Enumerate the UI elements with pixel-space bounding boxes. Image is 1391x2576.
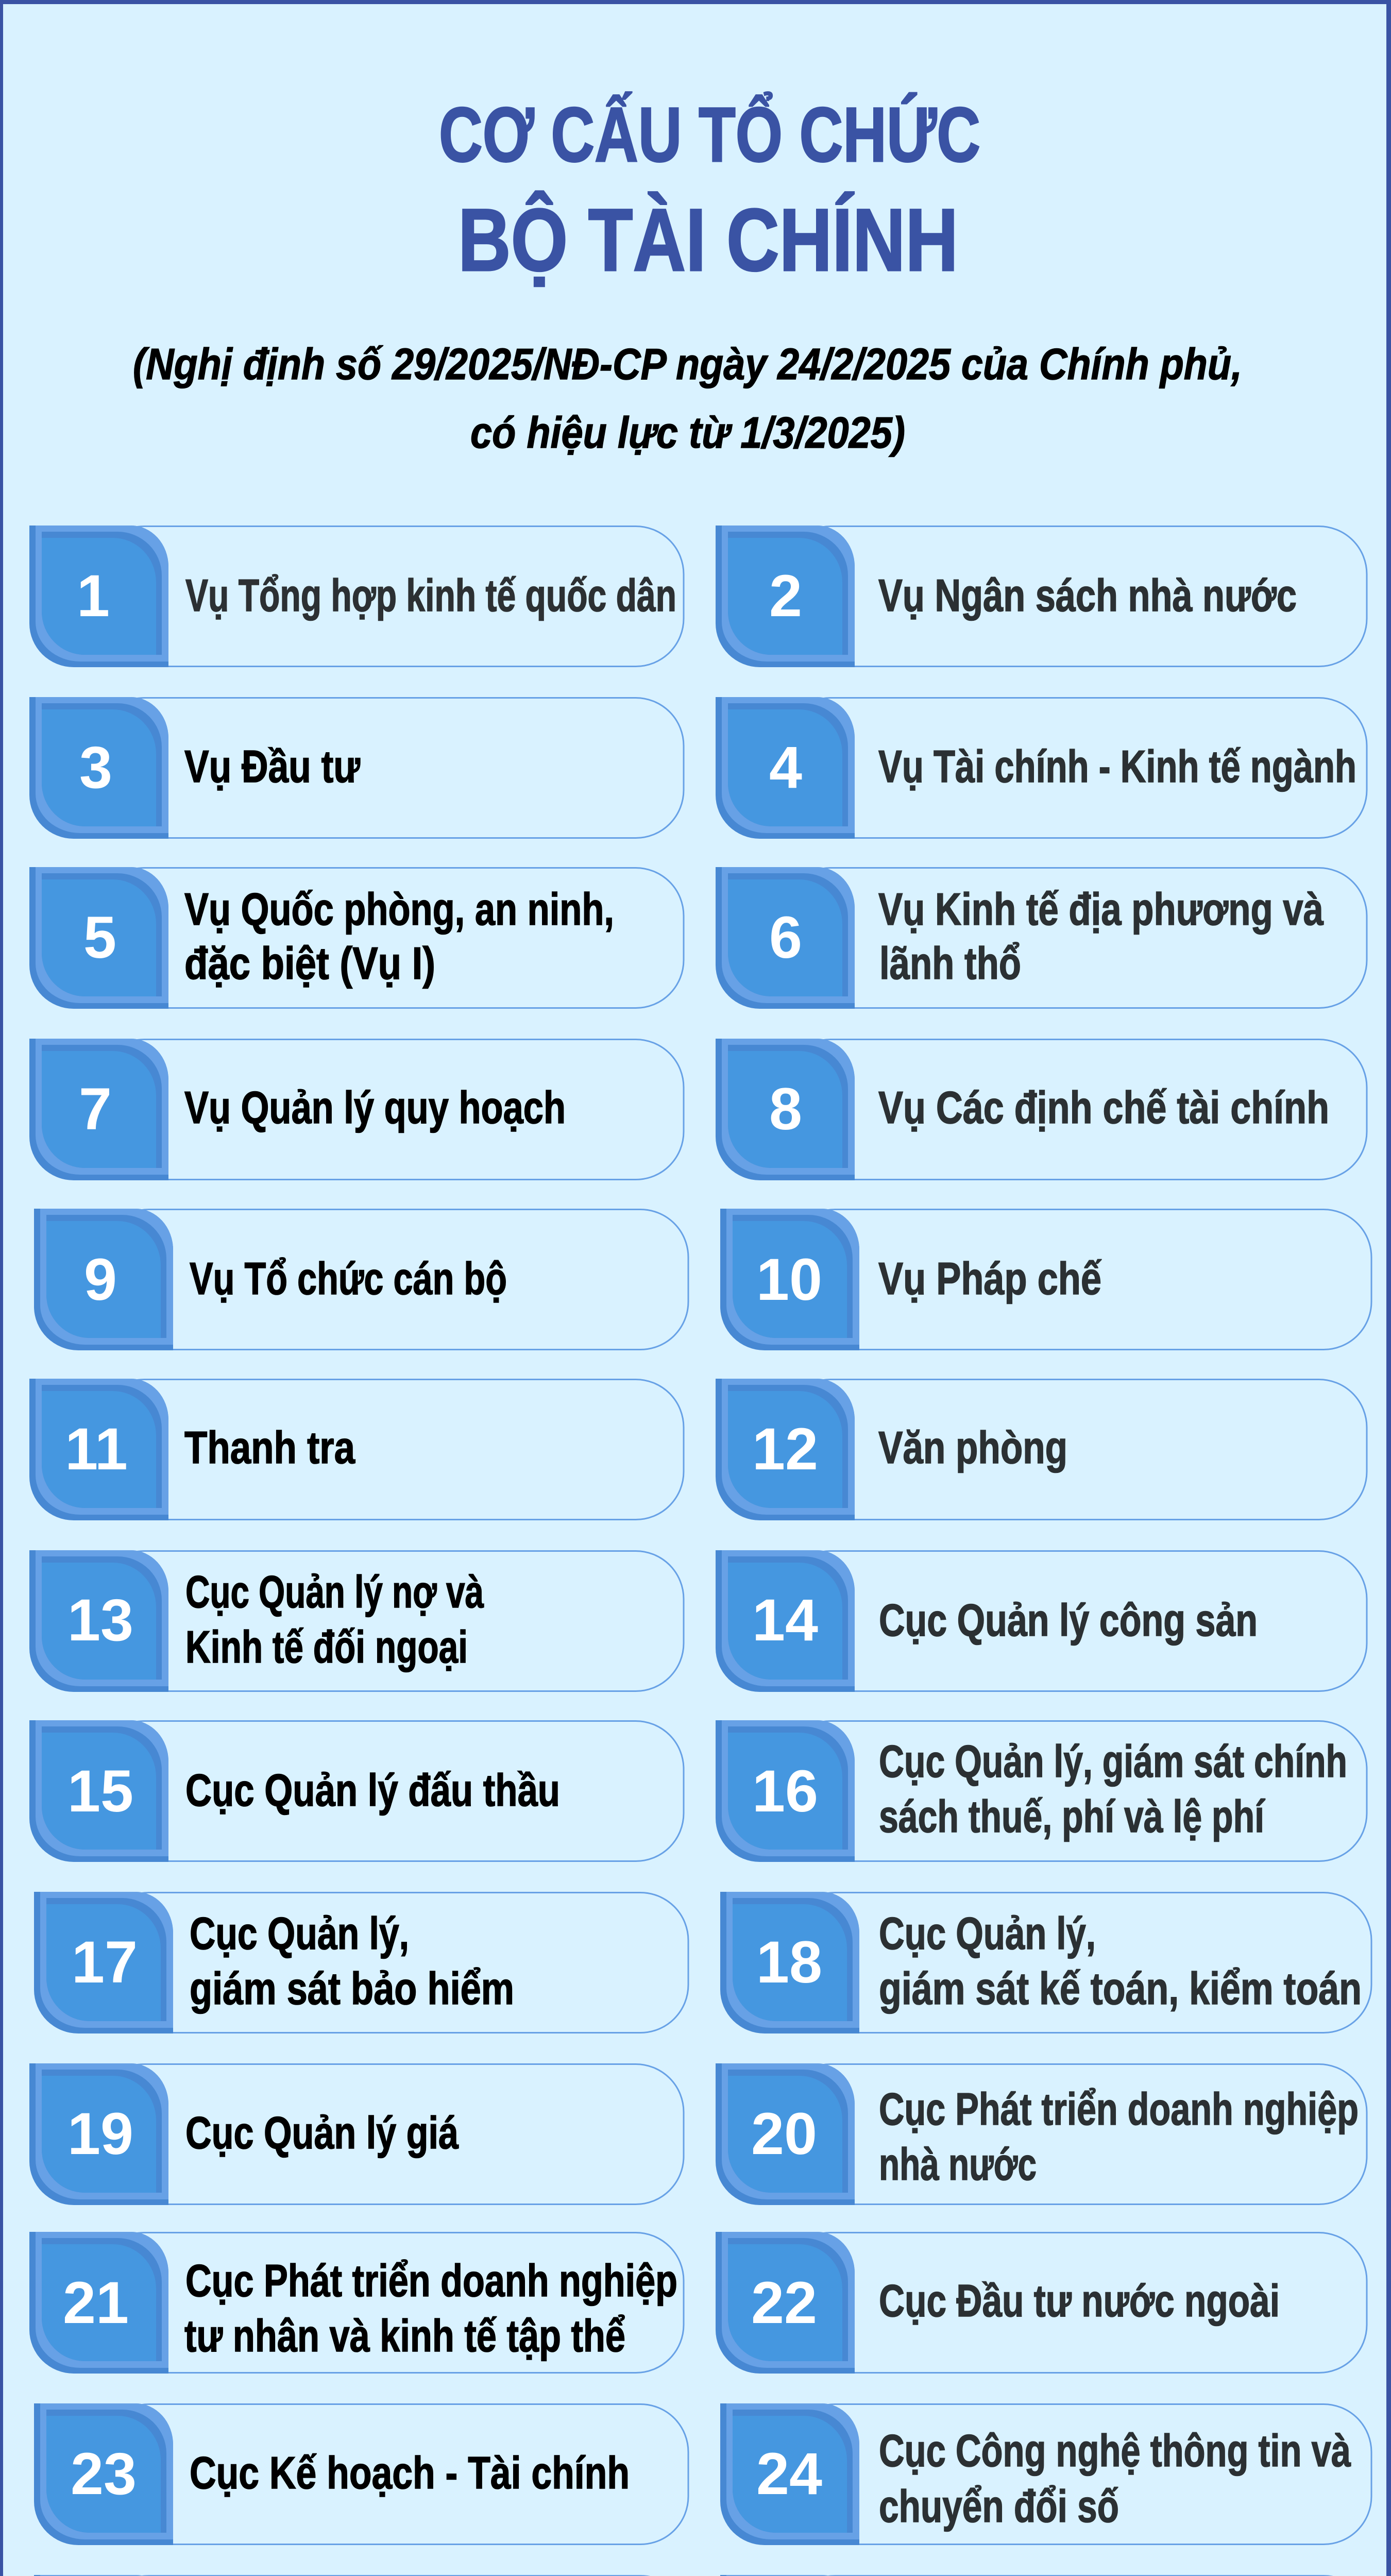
- subtitle: (Nghị định số 29/2025/NĐ-CP ngày 24/2/2025 của Chính phủ,: [133, 340, 1242, 389]
- card 6: [716, 867, 1367, 1009]
- card 26: [720, 2575, 1371, 2576]
- card 10: 10: [756, 1247, 822, 1313]
- card 1: Vụ Tổng hợp kinh tế quốc dân: [185, 570, 676, 621]
- card 17: Cục Quản lý,: [190, 1908, 409, 1959]
- card 24: [720, 2403, 1371, 2545]
- card 14: Cục Quản lý công sản: [879, 1595, 1258, 1646]
- card 20: nhà nước: [879, 2139, 1037, 2190]
- card 4: [716, 697, 1367, 839]
- card 13: [29, 1550, 684, 1692]
- card 3: 3: [79, 735, 112, 801]
- card 23: Cục Kế hoạch - Tài chính: [190, 2447, 630, 2498]
- card 23: 23: [71, 2441, 137, 2507]
- card 12: 12: [752, 1416, 818, 1482]
- card 20: 20: [751, 2101, 817, 2167]
- card 3: Vụ Đầu tư: [184, 741, 360, 792]
- card 16: [716, 1720, 1367, 1862]
- card 9: 9: [84, 1247, 117, 1313]
- card 15: [29, 1720, 684, 1862]
- card 13: 13: [67, 1587, 133, 1653]
- card 14: 14: [752, 1587, 818, 1653]
- card 22: [716, 2232, 1367, 2374]
- card 2: 2: [769, 563, 802, 629]
- card 9: Vụ Tổ chức cán bộ: [190, 1253, 507, 1304]
- card 4: 4: [769, 735, 802, 801]
- card 5: 5: [83, 905, 116, 971]
- card 5: đặc biệt (Vụ I): [184, 938, 435, 989]
- subtitle: [133, 340, 1242, 457]
- card 3: [29, 697, 684, 839]
- card 19: [29, 2063, 684, 2205]
- card 2: [716, 526, 1367, 667]
- card 8: [716, 1039, 1367, 1180]
- title: [439, 91, 980, 290]
- card 6: 6: [769, 905, 802, 971]
- card 9: [34, 1209, 688, 1350]
- card 16: sách thuế, phí và lệ phí: [879, 1791, 1265, 1842]
- card 25: [34, 2575, 688, 2576]
- card 19: Cục Quản lý giá: [185, 2107, 459, 2158]
- card 18: Cục Quản lý,: [879, 1908, 1096, 1959]
- card 7: [29, 1039, 684, 1180]
- card 1: [29, 526, 684, 667]
- card 2: Vụ Ngân sách nhà nước: [878, 570, 1297, 621]
- card 15: 15: [67, 1758, 133, 1824]
- card 15: Cục Quản lý đấu thầu: [185, 1765, 560, 1816]
- card 13: Kinh tế đối ngoại: [185, 1621, 468, 1672]
- card 11: [29, 1379, 684, 1520]
- card 23: [34, 2403, 688, 2545]
- card 17: giám sát bảo hiểm: [190, 1963, 514, 2014]
- card 13: Cục Quản lý nợ và: [185, 1566, 484, 1617]
- card 22: 22: [751, 2270, 817, 2336]
- card 20: [716, 2063, 1367, 2205]
- card 21: 21: [63, 2270, 129, 2336]
- card 12: Văn phòng: [878, 1422, 1067, 1473]
- card 21: [29, 2232, 684, 2374]
- card 21: tư nhân và kinh tế tập thể: [184, 2310, 625, 2361]
- card 7: 7: [79, 1076, 112, 1142]
- card 17: 17: [72, 1929, 138, 1995]
- card 17: [34, 1892, 688, 2033]
- card 10: Vụ Pháp chế: [878, 1253, 1102, 1304]
- card 6: lãnh thổ: [879, 938, 1021, 989]
- title: BỘ TÀI CHÍNH: [458, 191, 958, 290]
- card 5: [29, 867, 684, 1009]
- card 11: Thanh tra: [184, 1422, 355, 1473]
- card 8: 8: [769, 1076, 802, 1142]
- card 24: chuyển đổi số: [879, 2481, 1119, 2532]
- subtitle: có hiệu lực từ 1/3/2025): [470, 409, 905, 457]
- card 5: Vụ Quốc phòng, an ninh,: [184, 884, 614, 935]
- card 22: Cục Đầu tư nước ngoài: [879, 2275, 1280, 2326]
- card 18: 18: [756, 1929, 822, 1995]
- title: CƠ CẤU TỔ CHỨC: [439, 91, 980, 178]
- card 7: Vụ Quản lý quy hoạch: [184, 1082, 566, 1133]
- card 24: 24: [756, 2441, 822, 2507]
- card 16: 16: [752, 1758, 818, 1824]
- card 19: 19: [67, 2101, 133, 2167]
- card 21: Cục Phát triển doanh nghiệp: [185, 2255, 677, 2306]
- card 18: [720, 1892, 1371, 2033]
- card 10: [720, 1209, 1371, 1350]
- card 12: [716, 1379, 1367, 1520]
- card 11: 11: [65, 1416, 128, 1482]
- card 14: [716, 1550, 1367, 1692]
- card 1: 1: [77, 563, 110, 629]
